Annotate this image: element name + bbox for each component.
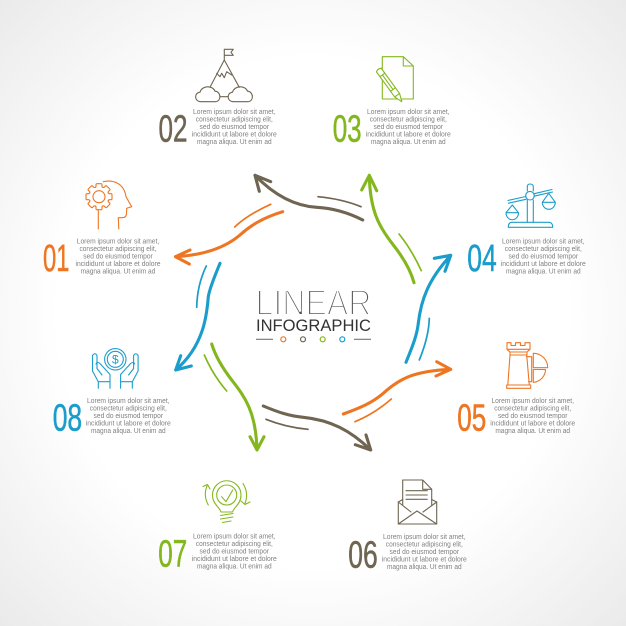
number 06: 06: [348, 534, 378, 576]
panel: step 04: [467, 184, 586, 280]
text block 08: sed do eiusmod tempor: [94, 413, 164, 420]
text block 07: sed do eiusmod tempor: [200, 548, 270, 555]
text block 06: consectetur adipiscing elit,: [386, 542, 463, 548]
panel: step 05: [457, 343, 575, 440]
text block 01: magna aliqua. Ut enim ad: [81, 269, 155, 276]
text block 04: [501, 239, 586, 276]
icon: light bulb with check: [203, 481, 250, 522]
text block 02: sed do eiusmod tempor: [200, 124, 270, 131]
text block 04: consectetur adipiscing elit,: [505, 246, 582, 253]
arrow 04 blue: [406, 255, 451, 362]
arrow 01 orange: [176, 204, 283, 264]
number 02: 02: [158, 108, 188, 150]
icon: hands holding coin: $: [112, 352, 119, 366]
heading: infographic: INFOGRAPHIC: [256, 317, 371, 335]
text block 08: incididunt ut labore et dolore: [86, 420, 171, 428]
panel: step 03: [333, 57, 451, 151]
text block 07: consectetur adipiscing elit,: [196, 541, 273, 548]
text block 03: sed do eiusmod tempor: [374, 124, 444, 131]
text block 01: Lorem ipsum dolor sit amet,: [77, 239, 159, 246]
panel: step 01: [43, 181, 161, 280]
text block 07: Lorem ipsum dolor sit amet,: [193, 533, 276, 540]
text block 05: Lorem ipsum dolor sit amet,: [491, 398, 574, 405]
number 01: 01: [43, 238, 70, 280]
arrow 06 brown: [263, 406, 371, 450]
panel: step 02: [158, 49, 277, 150]
text block 06: magna aliqua. Ut enim ad: [387, 564, 462, 571]
text block 06: Lorem ipsum dolor sit amet,: [383, 534, 466, 541]
panel: step 08: [53, 349, 171, 440]
text block 03: Lorem ipsum dolor sit amet,: [367, 109, 450, 116]
center title: [256, 282, 372, 342]
panel: step 07: [158, 481, 277, 576]
text block 01: sed do eiusmod tempor: [83, 254, 153, 261]
title ornament: [256, 337, 371, 342]
text block 06: [382, 534, 467, 571]
arrow 08 blue: [176, 263, 220, 370]
text block 07: magna aliqua. Ut enim ad: [197, 563, 272, 570]
icon: chess rook with pie: [507, 343, 548, 388]
number 04: 04: [467, 238, 497, 280]
text block 02: Lorem ipsum dolor sit amet,: [193, 109, 276, 116]
arrow 07 green: [204, 344, 264, 450]
text block 04: incididunt ut labore et dolore: [501, 261, 586, 268]
text block 08: Lorem ipsum dolor sit amet,: [87, 398, 170, 405]
text block 02: incididunt ut labore et dolore: [192, 132, 277, 138]
panel: step 06: [348, 480, 467, 576]
text block 01: incididunt ut labore et dolore: [76, 261, 161, 268]
text block 07: [192, 533, 277, 570]
text block 03: incididunt ut labore et dolore: [366, 132, 451, 138]
number 05: 05: [457, 398, 486, 440]
text block 03: consectetur adipiscing elit,: [370, 116, 447, 124]
text block 01: consectetur adipiscing elit,: [80, 246, 157, 253]
number 07: 07: [158, 534, 187, 576]
icon: open envelope with letter: [398, 480, 437, 524]
text block 08: consectetur adipiscing elit,: [90, 406, 167, 412]
text block 06: incididunt ut labore et dolore: [382, 556, 467, 564]
icon: head with gear: [86, 181, 132, 229]
text block 02: magna aliqua. Ut enim ad: [197, 139, 272, 146]
heading: linear: LINEAR: [256, 282, 372, 323]
text block 05: [490, 398, 575, 435]
text block 08: magna aliqua. Ut enim ad: [91, 428, 166, 435]
text block 07: incididunt ut labore et dolore: [192, 556, 277, 563]
text block 05: magna aliqua. Ut enim ad: [495, 428, 570, 435]
icon: balance scale: [506, 184, 555, 227]
number 08: 08: [53, 398, 82, 440]
text block 06: sed do eiusmod tempor: [390, 549, 460, 556]
text block 03: [366, 109, 451, 146]
text block 04: Lorem ipsum dolor sit amet,: [502, 239, 585, 246]
text block 02: [192, 109, 277, 146]
arrow 05 orange: [343, 362, 451, 422]
text block 02: consectetur adipiscing elit,: [196, 116, 273, 124]
icon: mountain with flag: [196, 49, 252, 102]
text block 05: incididunt ut labore et dolore: [490, 420, 575, 428]
text block 04: sed do eiusmod tempor: [509, 254, 579, 261]
text block 05: sed do eiusmod tempor: [498, 413, 568, 420]
number 03: 03: [333, 108, 362, 150]
text block 05: consectetur adipiscing elit,: [494, 406, 571, 412]
text block 03: magna aliqua. Ut enim ad: [371, 139, 446, 146]
text block 08: [86, 398, 171, 435]
arrow 02 brown: [255, 175, 363, 220]
text block 04: magna aliqua. Ut enim ad: [506, 269, 581, 276]
text block 01: [76, 239, 161, 276]
icon: document with pen: [376, 57, 413, 103]
arrow 03 green: [362, 175, 421, 283]
